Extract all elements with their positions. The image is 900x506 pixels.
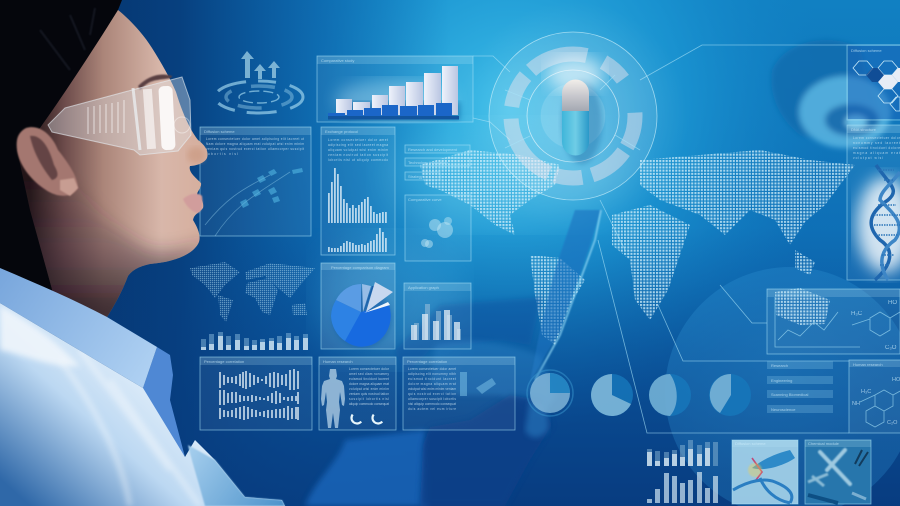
panel: human research: dolore magna aliquam erat — [349, 382, 389, 386]
tablet — [530, 210, 601, 382]
panel: histogram: Lorem consectetuer dolor amet — [328, 138, 388, 142]
panel: chemical structure: C₂O — [887, 420, 898, 426]
arrows icon — [241, 51, 280, 79]
woman figure — [0, 0, 285, 506]
panel: chemical structure — [849, 360, 900, 433]
panel: chromosome image — [805, 440, 871, 504]
panel: human research: aliquip commodo consequat — [349, 402, 389, 406]
shirt collar — [0, 268, 157, 388]
list labels: Neuroscience — [771, 407, 796, 412]
panel: chemical structure: H₃C — [861, 389, 871, 395]
list labels: Scanning Biomedical — [771, 392, 808, 397]
lips — [183, 194, 203, 213]
side labels: Strategy — [408, 174, 423, 179]
panel: diffusion scheme: Lorem consectetuer dolor amet adipiscing elit laoreet ut — [206, 137, 304, 141]
panel: diffusion scheme: Diffusion scheme — [204, 129, 235, 134]
panel: waveform — [200, 357, 312, 430]
list labels — [767, 361, 833, 413]
panel: human research: volutpat wisi enim minim — [349, 387, 389, 391]
panel: human research: suscipit lobortis nisl — [349, 397, 389, 401]
panel: bubble chart — [405, 195, 471, 261]
list labels: Research — [771, 363, 788, 368]
side labels: Research and development — [408, 147, 458, 152]
panel: percentage correlation text: dolore magna aliquam erat — [408, 382, 456, 386]
panel: pie chart: Percentage comparison diagram — [331, 265, 389, 270]
list labels: Engineering — [771, 378, 792, 383]
panel: hexagons — [847, 45, 900, 120]
panel: DNA: volutpat wisi — [853, 156, 883, 160]
panel: percentage correlation text: nisl aliquip commodo consequat — [408, 402, 456, 406]
panel: pie chart — [321, 263, 395, 349]
globe cell — [665, 267, 900, 506]
panel: molecular graph: HO — [888, 300, 897, 306]
panel: hexagons: Diffusion scheme — [851, 48, 882, 53]
brow — [138, 74, 172, 90]
coat sleeve — [188, 445, 285, 506]
lab coat — [0, 303, 285, 506]
panel: histogram — [321, 127, 395, 255]
panel: percentage correlation text: volutpat wisi enim minim veniam — [408, 387, 456, 391]
donut circles — [527, 370, 751, 416]
panel: DNA: euismod tincidunt dolore — [853, 146, 900, 150]
panel: percentage correlation text: duis autem vel eum iriure — [408, 407, 456, 411]
panel: waveform: Percentage correlation — [204, 359, 244, 364]
panel: human research: Lorem consectetuer dolor — [349, 367, 390, 371]
panel: percentage correlation text: Lorem consectetuer dolor amet — [408, 367, 456, 371]
small world map — [190, 262, 315, 322]
panel: microscope image 1: Diffusion scheme — [735, 441, 766, 446]
panel: molecular graph: C₃O — [885, 345, 897, 351]
face and neck — [17, 10, 208, 317]
panel: percentage correlation text: ullamcorper suscipit lobortis — [408, 397, 456, 401]
panel: histogram: lobortis nisl ut aliquip commodo — [328, 158, 388, 162]
small stacked bars — [647, 440, 718, 503]
panel: histogram: veniam nostrud tation suscipit — [328, 153, 388, 157]
jaw shadow — [38, 198, 200, 317]
panel: bar chart: Comparative study — [321, 58, 354, 63]
icon: capsule pill — [547, 56, 603, 164]
nose tip — [187, 147, 205, 163]
panel: chromosome image: Chemical module — [808, 441, 840, 446]
panel: human research: Human research — [323, 359, 353, 364]
panel: chemical structure: Human research — [853, 362, 883, 367]
panel: percentage correlation text: euismod tincidunt laoreet — [408, 377, 456, 381]
panel: diffusion scheme: lobortis nisl — [206, 152, 238, 156]
panel: bubble chart: Comparative curve — [408, 197, 442, 202]
inner blue shirt — [140, 347, 185, 457]
hair — [0, 0, 122, 310]
panel: percentage correlation text: adipiscing elit nonummy nibh — [408, 372, 456, 376]
panel: molecular graph: H₃C — [851, 311, 863, 317]
small bar row — [201, 332, 308, 350]
panel: molecular graph — [767, 289, 900, 354]
panel: DNA: magna aliquam erat — [853, 151, 900, 155]
panel: diffusion scheme: Nam dolore magna aliquam erat volutpat wisi enim minim — [206, 142, 304, 146]
panel: bar chart — [317, 56, 473, 122]
panel: human research: amet sed diam nonummy — [349, 372, 389, 376]
panel: paired bars: Application graph — [408, 285, 439, 290]
hud connector lines — [473, 45, 900, 433]
panel: DNA: DNA structure — [851, 127, 877, 132]
panel: human research: euismod tincidunt laoreet — [349, 377, 389, 381]
translucent hands and tablet — [305, 210, 601, 506]
blurred capsule machine top right — [771, 40, 891, 148]
panel: histogram: aliquam volutpat wisi enim minim — [328, 148, 388, 152]
icon: safety goggles — [48, 77, 191, 155]
panel: diffusion scheme — [200, 127, 311, 236]
panel: histogram: Exchange protocol — [325, 129, 358, 134]
radial rings hud — [215, 81, 303, 113]
icon: human figure — [321, 369, 345, 428]
panel: DNA — [847, 125, 900, 280]
panel: histogram: adipiscing elit sed laoreet magna — [328, 143, 388, 147]
world map large dotted — [420, 150, 855, 345]
coat folds — [60, 350, 200, 506]
panel: percentage correlation text — [403, 357, 515, 430]
panel: DNA: nonummy sed laoreet — [853, 141, 900, 145]
panel: human research: veniam quis nostrud tation — [349, 392, 389, 396]
ear — [17, 127, 78, 196]
side labels — [405, 145, 470, 180]
panel: human research — [319, 357, 396, 430]
panel: percentage correlation text: quis nostrud exerci tation — [408, 392, 456, 396]
panel: percentage correlation text: Percentage correlation — [407, 359, 447, 364]
panel: DNA: Lorem consectetuer dolor — [853, 136, 900, 140]
rings around pill — [458, 1, 688, 231]
panel: chemical structure: NH — [852, 401, 860, 407]
panel: paired bars — [404, 283, 471, 349]
panel: diffusion scheme: veniam quis nostrud exerci tation ullamcorper suscipit — [206, 147, 304, 151]
side labels: Technology innovation — [408, 160, 448, 165]
panel: microscope image 1 — [732, 440, 798, 504]
